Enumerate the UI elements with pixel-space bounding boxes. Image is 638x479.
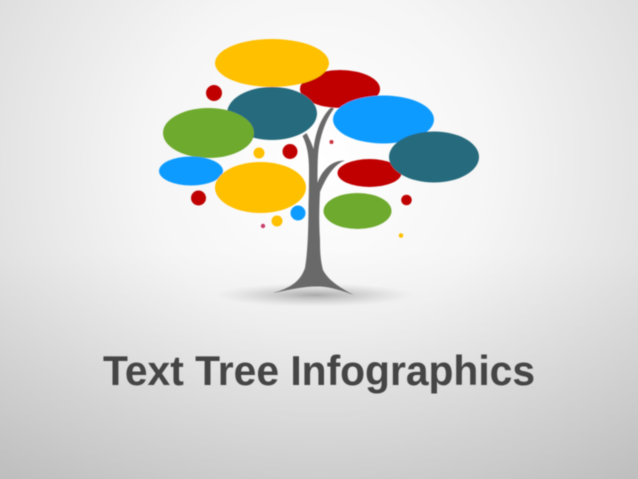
dot: red centre (282, 144, 298, 159)
dot: yellow centre (254, 148, 264, 158)
dot: small pink (261, 224, 265, 228)
dot: small yellow (399, 233, 403, 238)
dot: small red (330, 140, 334, 144)
tree ground shadow (215, 283, 415, 307)
oval: teal centre (227, 87, 317, 140)
oval: teal right (389, 132, 479, 182)
oval: blue left (159, 156, 223, 186)
oval: red top (300, 70, 380, 108)
dot: red right (401, 195, 412, 205)
title: Text Tree Infographics (103, 347, 535, 394)
tree (159, 39, 479, 295)
dot: yellow lower (272, 216, 282, 226)
icon: tree trunk and branches (273, 108, 354, 295)
oval: yellow top (215, 39, 329, 87)
dot: red upper left (206, 85, 222, 101)
oval: green low (324, 193, 392, 229)
oval: yellow middle (215, 162, 306, 213)
oval: green left (163, 108, 254, 158)
oval: blue large (333, 96, 434, 144)
dot: blue (290, 206, 306, 220)
oval: red right (338, 159, 402, 187)
dot: red lower left (191, 190, 206, 206)
